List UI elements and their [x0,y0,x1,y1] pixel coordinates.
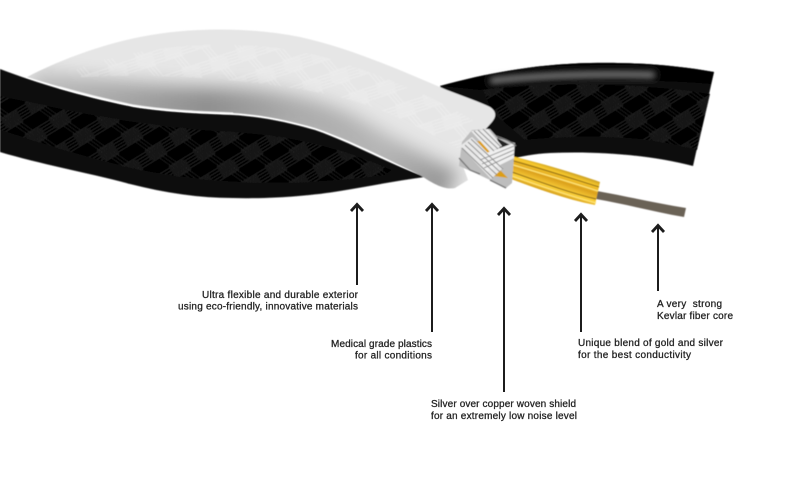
label: conductor [578,338,724,361]
cable illustration [0,30,720,217]
label: shield: Silver over copper woven shield [431,399,576,410]
label: exterior: using eco-friendly, innovative materials [178,302,358,312]
label: core: Kevlar fiber core [657,311,733,322]
label: core [657,299,733,322]
silver woven shield [459,129,516,188]
arrow: exterior [351,204,363,285]
label: core: A very strong [657,299,722,310]
label: exterior [178,290,359,312]
label: conductor: Unique blend of gold and silver [578,338,724,349]
back black band [440,63,720,166]
label: plastics [331,339,432,362]
label: plastics: Medical grade plastics [331,339,432,350]
gold and silver conductor [506,155,600,205]
arrow: core [652,226,664,291]
arrow: conductor [575,214,587,332]
white jacket [27,30,495,190]
label: conductor: for the best conductivity [578,350,691,361]
front black band [0,69,425,198]
label: plastics: for all conditions [355,350,432,362]
label: shield: for an extremely low noise level [431,411,577,422]
label: exterior: Ultra flexible and durable exterior [202,290,359,301]
cable infographic [0,30,733,422]
arrow: shield [498,208,510,392]
grey kevlar core [596,191,686,217]
label: shield [431,399,577,422]
arrow: plastics [426,204,438,332]
